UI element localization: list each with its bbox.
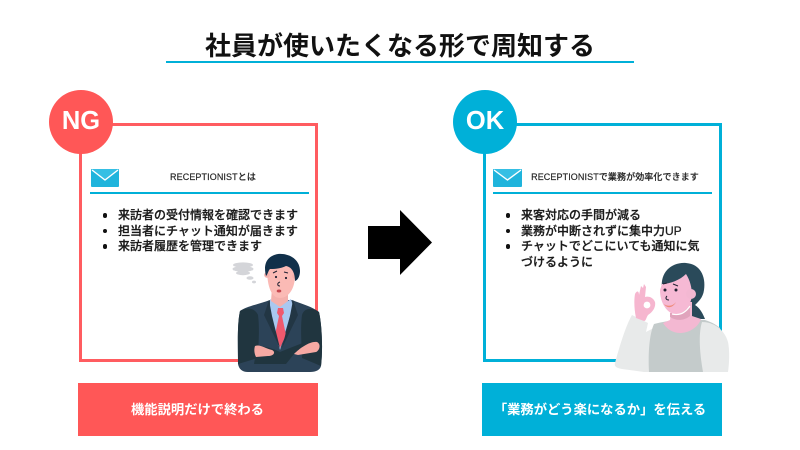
panel: OK frame — [482, 123, 722, 362]
torso — [649, 320, 722, 372]
callout: OK: 「業務がどう楽になるか」を伝える — [494, 402, 706, 417]
icon: OK envelope — [493, 169, 522, 187]
NG bullet list: 担当者にチャット通知が届きます — [118, 224, 298, 238]
thought bubble — [232, 262, 256, 283]
features — [664, 288, 666, 292]
illustration: man with crossed arms — [232, 254, 322, 372]
face outline highlight — [672, 306, 690, 315]
hair — [265, 254, 300, 281]
neck and chest — [663, 302, 701, 333]
right sleeve — [700, 322, 729, 372]
OK heading line — [493, 192, 712, 194]
OK panel heading: RECEPTIONISTで業務が効率化できます — [531, 172, 699, 182]
title: 社員が使いたくなる形で周知する — [205, 31, 595, 61]
title underline — [166, 61, 634, 63]
hair back — [662, 263, 705, 319]
arrow — [368, 210, 432, 275]
NG bullet list — [103, 208, 298, 253]
OK bullet list: 来客対応の手間が減る — [521, 208, 641, 222]
hand — [634, 284, 655, 321]
face — [660, 274, 692, 314]
OK bullet list: チャットでどこにいても通知に気づけるように — [521, 239, 700, 269]
illustration: woman making OK sign — [614, 262, 729, 372]
callout: NG: 機能説明だけで終わる — [131, 402, 264, 417]
icon: NG envelope — [91, 169, 119, 187]
features — [273, 271, 288, 286]
white arm — [615, 315, 662, 372]
lapels — [264, 300, 298, 348]
callout: OK — [482, 383, 722, 436]
tie — [275, 308, 286, 348]
OK bullet list: 業務が中断されずに集中力UP — [521, 224, 682, 238]
NG panel heading: RECEPTIONISTとは — [170, 172, 256, 182]
badge: OK: OK — [466, 107, 504, 135]
badge: NG: NG — [62, 107, 100, 135]
NG bullet list: 来訪者履歴を管理できます — [118, 239, 262, 253]
NG bullet list: 来訪者の受付情報を確認できます — [118, 208, 298, 222]
callout: NG — [78, 383, 318, 436]
panel: NG frame — [79, 123, 318, 362]
torso — [238, 300, 322, 372]
badge: OK — [453, 90, 517, 154]
neck and face — [271, 288, 288, 307]
shirt — [270, 299, 293, 350]
crossed arms — [254, 341, 310, 364]
badge: NG — [49, 90, 113, 154]
OK bullet list — [506, 208, 700, 269]
NG heading line — [90, 192, 309, 194]
